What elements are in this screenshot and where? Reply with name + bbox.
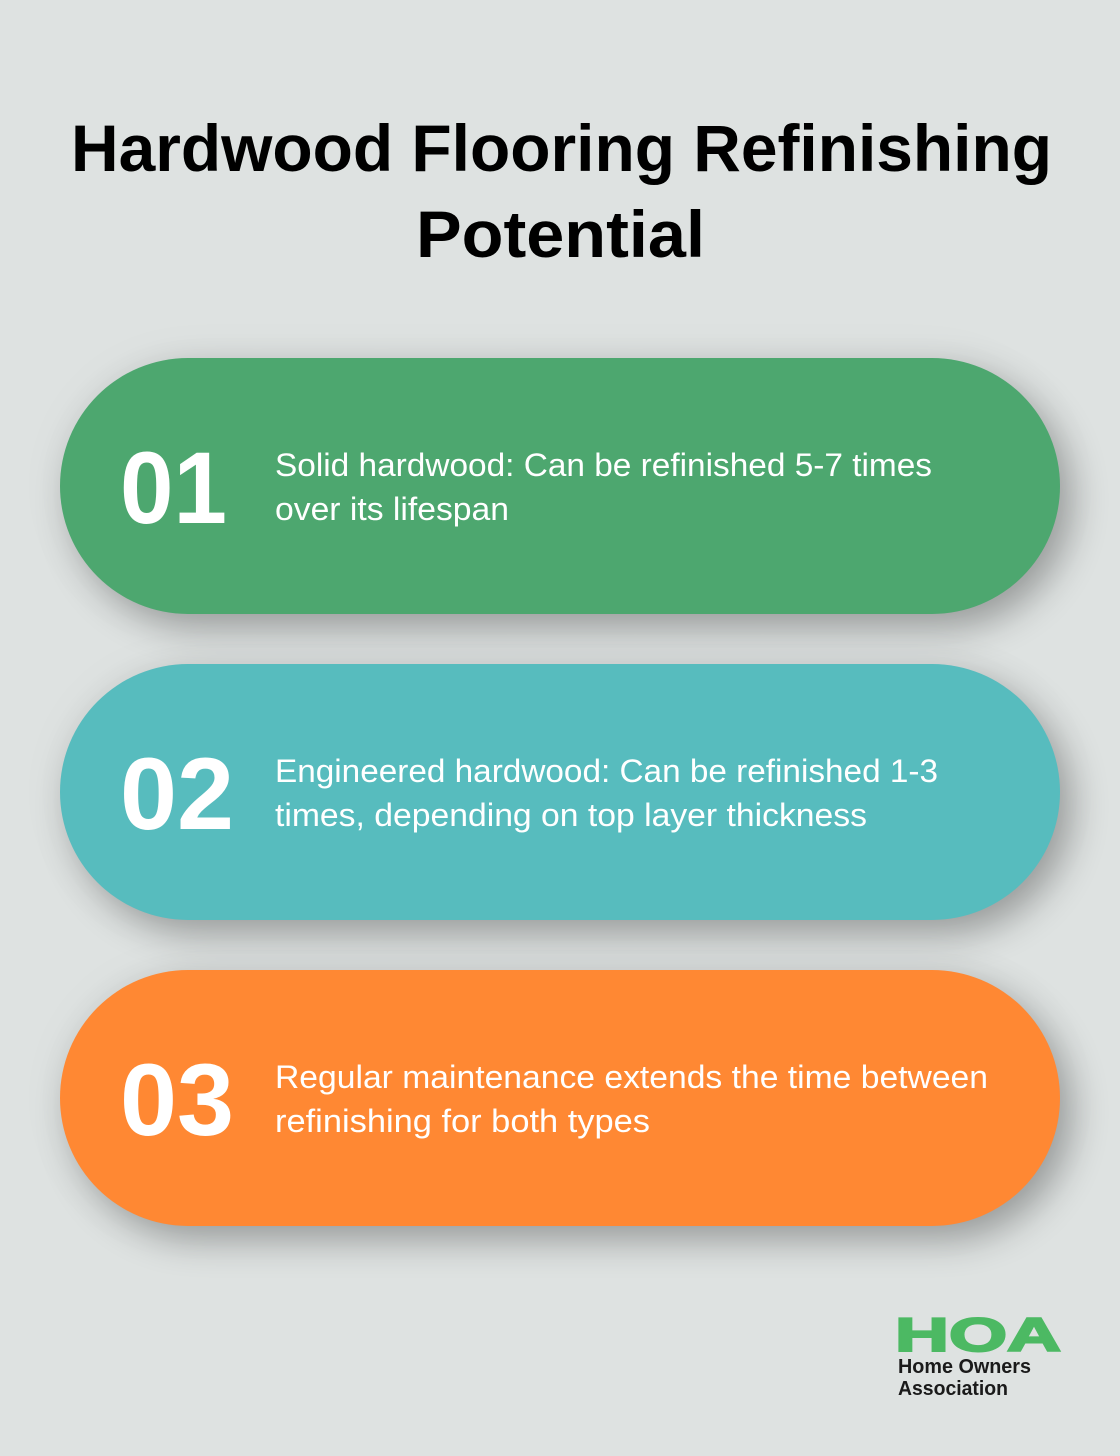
- text: engineered hardwood: times, depending on top layer thickness: [275, 797, 867, 833]
- logo: HOA Home Owners Association: Home Owners: [898, 1356, 1031, 1378]
- title: Potential: [416, 197, 705, 271]
- number 02: 02: [120, 737, 234, 851]
- logo: HOA Home Owners Association: Association: [898, 1378, 1008, 1400]
- number 01: 01: [120, 431, 227, 545]
- text: regular maintenance: refinishing for both types: [275, 1103, 650, 1139]
- title: Hardwood Flooring Refinishing: [71, 111, 1052, 185]
- logo: HOA Home Owners Association: HOA: [895, 1308, 1061, 1361]
- panel: engineered hardwood: [60, 664, 1060, 920]
- text: regular maintenance: [275, 1059, 988, 1139]
- number 03: 03: [120, 1043, 234, 1157]
- logo: HOA Home Owners Association: [895, 1308, 1062, 1400]
- panel: solid hardwood: [60, 358, 1060, 614]
- title: [71, 111, 1052, 271]
- text: regular maintenance: Regular maintenance extends the time between: [275, 1059, 988, 1095]
- text: solid hardwood: over its lifespan: [275, 491, 509, 527]
- text: solid hardwood: [275, 447, 932, 527]
- panel: regular maintenance: [60, 970, 1060, 1226]
- text: solid hardwood: Solid hardwood: Can be refinished 5-7 times: [275, 447, 932, 483]
- text: engineered hardwood: [275, 753, 938, 833]
- text: engineered hardwood: Engineered hardwood: Can be refinished 1-3: [275, 753, 938, 789]
